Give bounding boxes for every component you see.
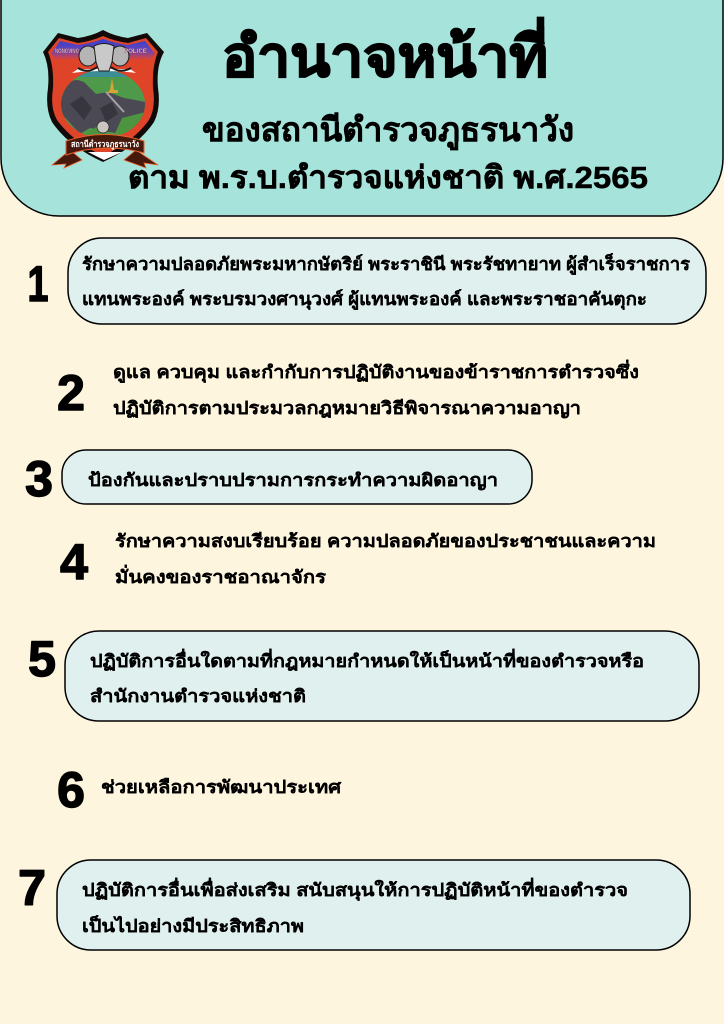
item 4 [60,531,656,590]
white cloud strip [72,69,136,73]
text 1 line 2: แทนพระองค์ พระบรมวงศานุวงศ์ ผู้แทนพระองค์ และพระราชอาคันตุกะ [82,288,647,311]
item 6 [57,762,342,818]
subtitle line 1: ของสถานีตำรวจภูธรนาวัง [202,111,574,151]
number 7: 7 [18,860,46,916]
number 6: 6 [57,762,85,818]
pill 1 [68,238,706,324]
item 3 [25,450,532,507]
number 4: 4 [60,534,88,590]
item 1 [28,238,706,324]
text 5 line 1: ปฏิบัติการอื่นใดตามที่กฎหมายกำหนดให้เป็นหน้าที่ของตำรวจหรือ [90,648,644,671]
number 2: 2 [57,365,85,421]
number 5: 5 [28,631,56,687]
emblem [97,121,109,133]
number 3: 3 [25,451,53,507]
text 7 line 2: เป็นไปอย่างมีประสิทธิภาพ [82,914,304,936]
text 3: ป้องกันและปราบปรามการกระทำความผิดอาญา [88,470,498,491]
pill 5 [65,631,699,721]
text 4 line 1: รักษาความสงบเรียบร้อย ความปลอดภัยของประชาชนและความ [115,531,656,551]
subtitle line 2: ตาม พ.ร.บ.ตำรวจแห่งชาติ พ.ศ.2565 [128,160,648,195]
text 4 line 2: มั่นคงของราชอาณาจักร [115,564,327,587]
text 2 line 1: ดูแล ควบคุม และกำกับการปฏิบัติงานของข้าราชการตำรวจซึ่ง [113,359,639,384]
text 7 line 1: ปฏิบัติการอื่นเพื่อส่งเสริม สนับสนุนให้การปฏิบัติหน้าที่ของตำรวจ [82,877,628,901]
pill 3 [62,450,532,504]
text 2 line 2: ปฏิบัติการตามประมวลกฎหมายวิธีพิจารณาความอาญา [113,398,581,419]
landscape photo [61,71,145,136]
text 6: ช่วยเหลือการพัฒนาประเทศ [101,777,342,797]
ribbon: สถานีตำรวจภูธรนาวัง [71,139,139,150]
title: อำนาจหน้าที่ [222,17,548,88]
icon: police badge shield: POLICE [124,49,147,55]
text 1 line 1: รักษาความปลอดภัยพระมหากษัตริย์ พระราชินี พระรัชทายาท ผู้สำเร็จราชการ [82,252,691,276]
pill 7 [57,860,690,950]
item 7 [18,860,690,950]
item 5 [28,631,699,721]
number 1: 1 [28,256,48,312]
icon: elephant heads [78,44,131,71]
header panel [1,0,723,216]
item 2 [57,359,639,421]
icon: police badge shield [43,30,164,168]
text 5 line 2: สำนักงานตำรวจแห่งชาติ [90,686,306,706]
icon: police badge shield: NONGVING [55,49,79,55]
